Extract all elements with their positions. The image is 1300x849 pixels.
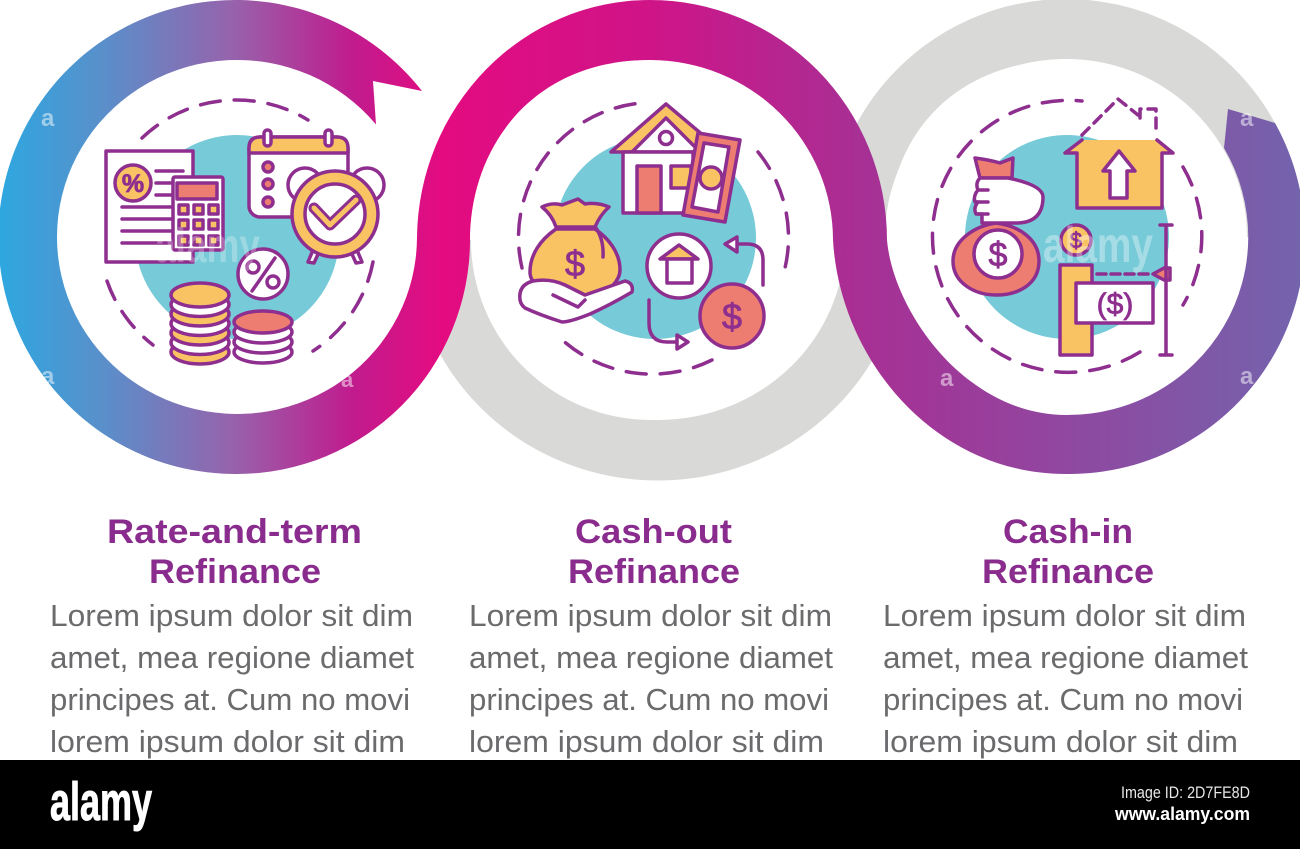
heading: Cash-in — [1003, 513, 1133, 551]
watermark letters: a — [341, 367, 354, 392]
gradient ribbon with arrow tips — [0, 0, 1300, 474]
website: www.alamy.com — [1114, 804, 1250, 824]
icon: small dollar coin — [1061, 225, 1091, 255]
teal backdrop circle — [554, 137, 756, 339]
icon: alarm clock with check — [288, 168, 384, 263]
footer logo: alamy — [50, 772, 152, 832]
icon: banknote — [683, 133, 740, 222]
body text: lorem ipsum dolor sit dim — [469, 724, 824, 759]
icon: percent badge — [238, 249, 288, 299]
icon: money bag: $ — [565, 243, 585, 284]
panel: rate-and-term refinance text — [50, 513, 414, 759]
icon: money bag — [530, 199, 620, 300]
body text: Lorem ipsum dolor sit dim — [50, 598, 413, 633]
grey ribbon segments — [441, 29, 1274, 450]
watermark letters: alamy — [1043, 217, 1153, 273]
watermark letters: a — [41, 105, 55, 132]
icon: money bag in fist: $ — [989, 236, 1008, 274]
body text: Lorem ipsum dolor sit dim — [883, 598, 1246, 633]
body text: Lorem ipsum dolor sit dim — [469, 598, 832, 633]
icon: house — [611, 104, 723, 213]
icon: short coin stack — [234, 311, 292, 363]
heading: Rate-and-term — [107, 513, 362, 551]
arrow: home to coin — [649, 300, 688, 349]
watermark letters: a — [1240, 105, 1254, 132]
icon: home badge — [647, 234, 711, 298]
arrow: coin to home — [725, 237, 763, 285]
icon: percent document — [106, 151, 193, 262]
heading: Cash-out — [575, 513, 732, 551]
icon: price sign: ($) — [1097, 288, 1133, 321]
icon: price sign — [1060, 225, 1172, 355]
dashed ring — [932, 100, 1202, 372]
icon: dollar coin — [700, 284, 764, 348]
heading: Refinance — [149, 553, 321, 591]
heading: Refinance — [982, 553, 1154, 591]
body text: lorem ipsum dolor sit dim — [50, 724, 405, 759]
footer bar — [0, 760, 1300, 849]
icon: percent document: % — [122, 170, 144, 198]
icon: dollar coin: $ — [722, 296, 742, 337]
dashed ring — [107, 100, 373, 351]
teal backdrop circle — [135, 135, 339, 339]
teal backdrop circle — [965, 135, 1169, 339]
body text: amet, mea regione diamet — [883, 640, 1248, 675]
white circle: panel 3 — [885, 59, 1247, 415]
watermark letters: a — [41, 363, 55, 390]
dashed ring — [519, 103, 788, 374]
icon group: rate-and-term refinance — [106, 100, 384, 364]
icon: money bag in fist — [953, 158, 1043, 295]
white circle: panel 2 — [471, 60, 845, 420]
icon: small dollar coin: $ — [1070, 228, 1082, 253]
icon group: cash-in refinance — [932, 99, 1202, 372]
icon: tall coin stack — [171, 283, 229, 364]
icon group: cash-out refinance — [519, 103, 788, 374]
icon: open hand — [520, 280, 632, 322]
panel: cash-out refinance text — [469, 513, 833, 759]
body text: lorem ipsum dolor sit dim — [883, 724, 1238, 759]
watermark letters: a — [940, 365, 954, 392]
watermark letters: a — [1240, 363, 1254, 390]
body text: amet, mea regione diamet — [50, 640, 414, 675]
icon: calculator — [173, 177, 223, 250]
body text: principes at. Cum no movi — [50, 682, 410, 717]
body text: principes at. Cum no movi — [883, 682, 1243, 717]
icon: house with arrow — [1065, 99, 1173, 208]
white circle: panel 1 — [57, 60, 417, 414]
watermark letters — [41, 105, 1254, 392]
watermark letters: alamy — [155, 220, 260, 273]
body text: amet, mea regione diamet — [469, 640, 833, 675]
icon: calendar — [249, 130, 348, 217]
body text: principes at. Cum no movi — [469, 682, 829, 717]
heading: Refinance — [568, 553, 740, 591]
panel: cash-in refinance text — [883, 513, 1248, 759]
image id: Image ID: 2D7FE8D — [1121, 783, 1250, 802]
